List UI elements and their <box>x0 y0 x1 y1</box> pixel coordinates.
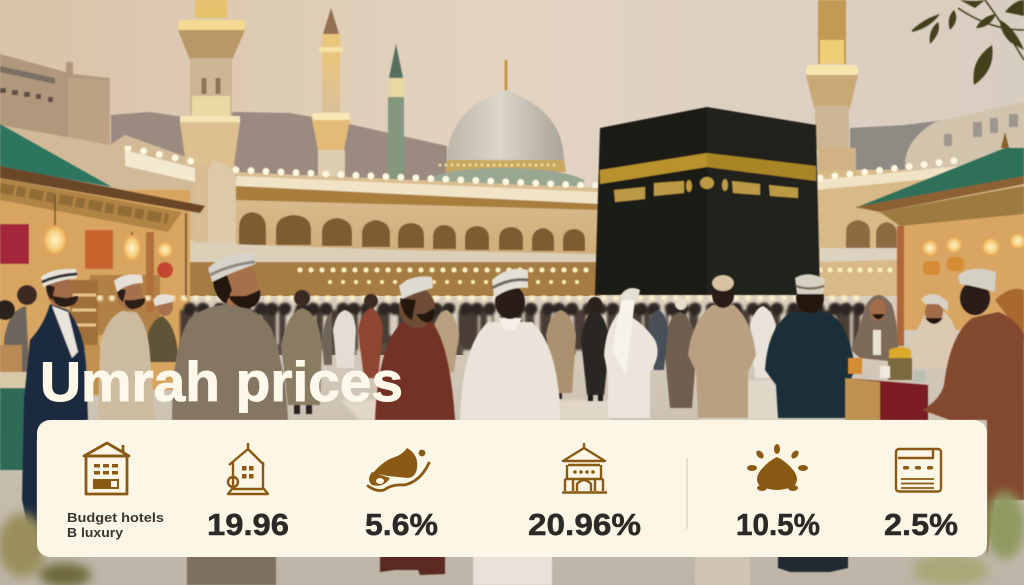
pilgrim in maroon robe <box>375 276 455 420</box>
seller in olive robe <box>146 294 178 362</box>
arches <box>239 212 585 251</box>
stat: 19.96 <box>207 443 289 542</box>
value: 10.5%: 10.5% <box>736 507 820 542</box>
stat: 20.96% <box>528 443 641 542</box>
pilgrim in navy robe <box>765 274 855 418</box>
seller in hood <box>851 295 898 362</box>
pilgrim in brown robe <box>922 269 1024 557</box>
minaret 3 green <box>388 44 404 181</box>
stall roof <box>0 124 205 232</box>
main dome <box>430 60 584 186</box>
mid-distance pilgrims <box>281 290 776 414</box>
background: evening sky <box>0 0 1024 300</box>
floor <box>0 296 1024 585</box>
label: budget hotels: Budget hotels <box>67 510 164 525</box>
pilgrim with white headscarf <box>604 288 658 418</box>
minaret 1 <box>178 0 245 242</box>
stat: 2.5% <box>884 449 958 542</box>
foliage: bottom-left blur <box>0 513 91 585</box>
pilgrim dark tan robe <box>664 298 697 408</box>
value: 19.96: 19.96 <box>207 507 289 542</box>
gold band <box>600 153 816 184</box>
icon: sun <box>747 444 808 491</box>
stat: 5.6% <box>365 448 438 542</box>
value: 2.5%: 2.5% <box>884 507 958 542</box>
lanterns <box>922 233 1024 275</box>
label: budget hotels: B luxury <box>67 525 124 540</box>
right vendor stall <box>855 132 1024 346</box>
pilgrim slate <box>648 310 668 370</box>
value: 5.6%: 5.6% <box>365 507 438 542</box>
lanterns <box>43 195 173 278</box>
icon: house <box>228 443 268 494</box>
floor reflections <box>340 380 780 420</box>
value: 20.96%: 20.96% <box>528 507 641 542</box>
mosque arcade left <box>125 150 1024 300</box>
stat: budget hotels <box>67 443 164 540</box>
mosque domes and minarets <box>178 0 858 242</box>
pilgrim white far <box>750 306 776 378</box>
pilgrim in beige robe <box>98 274 155 420</box>
left vendor stall <box>0 124 205 470</box>
icon: calendar sheet <box>896 449 941 492</box>
banners <box>0 224 29 264</box>
pilgrim white robe <box>333 310 356 368</box>
foliage: top-right branch <box>912 0 1024 85</box>
distant crowd <box>100 298 860 352</box>
title: Umrah prices <box>40 350 403 413</box>
pilgrim in grey-tan robe <box>172 253 288 420</box>
stat: 10.5% <box>736 444 820 542</box>
lower figures below the panel <box>187 555 848 585</box>
background buildings and mountains <box>0 54 1024 240</box>
string lights on rooflines <box>128 148 960 186</box>
pilgrim in white robe <box>460 269 561 420</box>
pilgrim in navy suit <box>22 269 88 557</box>
right minaret <box>806 0 858 180</box>
stall roof <box>855 132 1024 226</box>
icon: hotel <box>84 443 129 494</box>
icon: food <box>368 448 429 490</box>
icon: temple <box>562 443 607 492</box>
foliage: bottom-right blur <box>912 491 1024 585</box>
pilgrim red robe <box>358 294 383 378</box>
pilgrim in tan robe <box>688 275 756 418</box>
gold panels <box>614 177 798 202</box>
minaret 2 <box>312 8 350 182</box>
goods and green table <box>0 285 101 470</box>
pilgrim tan robe <box>434 310 459 372</box>
panel: price statistics <box>37 420 987 557</box>
pilgrim black robe <box>581 297 610 401</box>
seller in white headscarf <box>908 294 956 368</box>
pilgrim tan far <box>546 310 576 399</box>
vendor table with goods <box>845 347 928 420</box>
pilgrim grey robe <box>322 312 332 365</box>
pilgrim olive robe <box>281 290 322 414</box>
Kaaba <box>595 107 820 295</box>
